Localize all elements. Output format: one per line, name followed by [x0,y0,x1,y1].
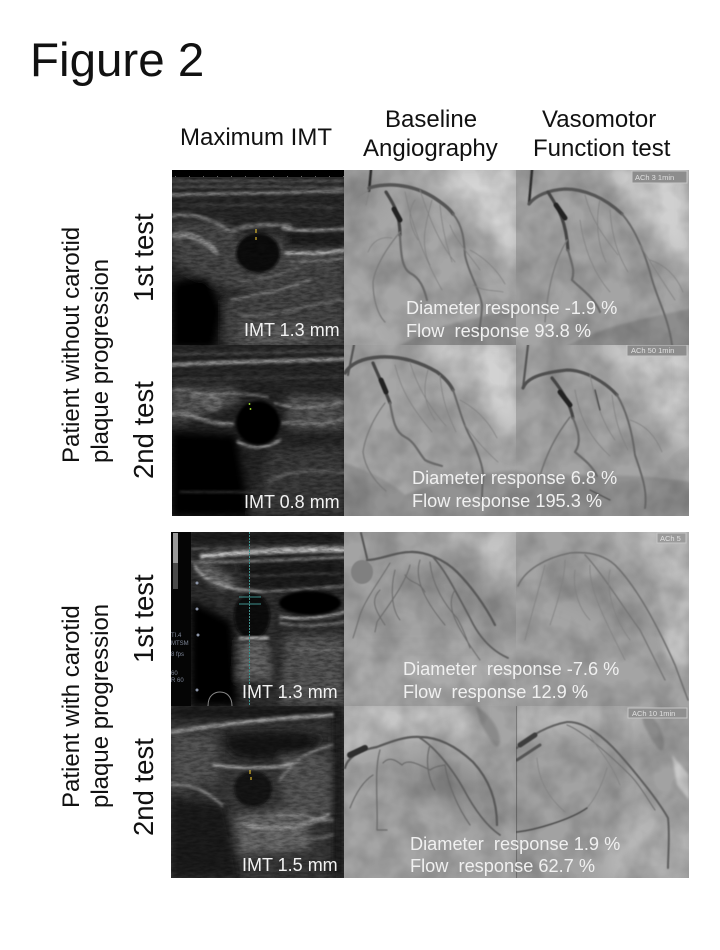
IMT label: IMT 1.3 mm [242,682,338,702]
column heading: baseline angiography: Baseline [385,106,477,133]
column heading: baseline angiography: Angiography [363,135,498,162]
depth scale strip: TI.4 [171,633,182,639]
IMT label: IMT 0.8 mm [244,492,340,512]
panel: angiography row 1 baseline [344,170,516,345]
response values [412,836,516,876]
depth scale strip: R 60 [171,678,184,684]
response values [408,300,516,341]
response values [404,662,516,702]
agent tag: ACh 10 1min [632,709,675,718]
row group label: patient without carotid plaque progression [58,227,114,463]
IMT label: IMT 1.5 mm [242,855,338,875]
coronary arteries [351,533,508,660]
row group label: patient with carotid plaque progression: Patient with carotid [58,605,85,808]
caliper [250,403,251,410]
column heading: vasomotor function test: Function test [533,135,671,162]
response values: Flow response 62.7 % [410,856,595,876]
coronary arteries [358,170,505,332]
response overflow: Flow response 93.8 % [406,321,591,341]
panel: angiography row 4 baseline [344,706,516,878]
row group label: patient with carotid plaque progression: plaque progression [87,604,114,808]
response overflow: Diameter response -1.9 % [406,298,617,318]
coronary arteries [516,706,669,878]
coronary arteries [529,170,683,345]
depth scale strip: 8 fps [171,652,184,658]
coronary arteries [345,737,500,835]
row label: second test, patient with progression: 2nd test [128,738,159,836]
agent tag [632,171,687,183]
coronary arteries [523,345,662,508]
agent tag: ACh 50 1min [631,346,674,355]
depth scale strip: 60 [171,671,178,677]
response overflow: Flow response 12.9 % [403,682,588,702]
title: Figure 2 [30,34,204,87]
response values: Diameter response 1.9 % [410,834,620,854]
row group label: patient without carotid plaque progression: Patient without carotid [58,227,85,463]
column heading: vasomotor function test [533,106,671,162]
coronary arteries [518,553,688,700]
response overflow: Flow response 195.3 % [412,491,602,511]
panel: angiography row 3 baseline [344,532,516,706]
response overflow: Diameter response 1.9 % [410,834,620,854]
panel: angiography row 2 vasomotor [516,345,689,516]
response values: Flow response 195.3 % [412,491,602,511]
response values: Diameter response -1.9 % [406,298,617,318]
response overflow: Flow response 62.7 % [410,856,595,876]
panel: ultrasound row 3 [171,532,344,706]
panel: angiography row 2 baseline [344,345,516,516]
panel: ultrasound row 2 [172,345,344,516]
response overflow [516,471,616,507]
panel: angiography row 1 vasomotor [516,170,689,345]
response values: Flow response 93.8 % [406,321,591,341]
agent tag: ACh 5 [660,534,681,543]
row group label: patient without carotid plaque progression: plaque progression [87,259,114,463]
row group label: patient with carotid plaque progression [58,604,114,808]
coronary arteries [345,345,498,500]
agent tag [628,708,687,718]
agent tag [657,533,686,543]
column heading: baseline angiography [363,106,498,162]
depth scale strip: MTSM [171,641,189,647]
row label: first test, patient without progression: 1st test [128,213,159,302]
panel: ultrasound row 4 [171,706,344,878]
response overflow: Diameter response 6.8 % [412,468,617,488]
response overflow [516,301,617,337]
row label: second test, patient without progression: 2nd test [128,381,159,479]
response overflow [516,662,619,698]
column heading: maximum IMT: Maximum IMT [180,124,332,151]
response values: Diameter response 6.8 % [412,468,617,488]
row label: first test, patient with progression: 1st test [128,574,159,663]
IMT label: IMT 1.3 mm [244,320,340,340]
measurement cursor [239,532,261,706]
response values: Flow response 12.9 % [403,682,588,702]
column heading: vasomotor function test: Vasomotor [542,106,656,133]
caliper [250,770,251,780]
response overflow [410,834,620,876]
panel: angiography row 4 vasomotor [516,706,689,878]
depth ruler [172,170,344,177]
depth scale strip [171,532,232,706]
response values: Diameter response -7.6 % [403,659,619,679]
response overflow: Diameter response -7.6 % [403,659,619,679]
response values [414,470,516,511]
panel: angiography row 3 vasomotor [516,532,689,706]
agent tag [627,345,687,356]
caliper [255,229,257,240]
panel: ultrasound row 1 [172,170,344,348]
agent tag: ACh 3 1min [635,173,674,182]
